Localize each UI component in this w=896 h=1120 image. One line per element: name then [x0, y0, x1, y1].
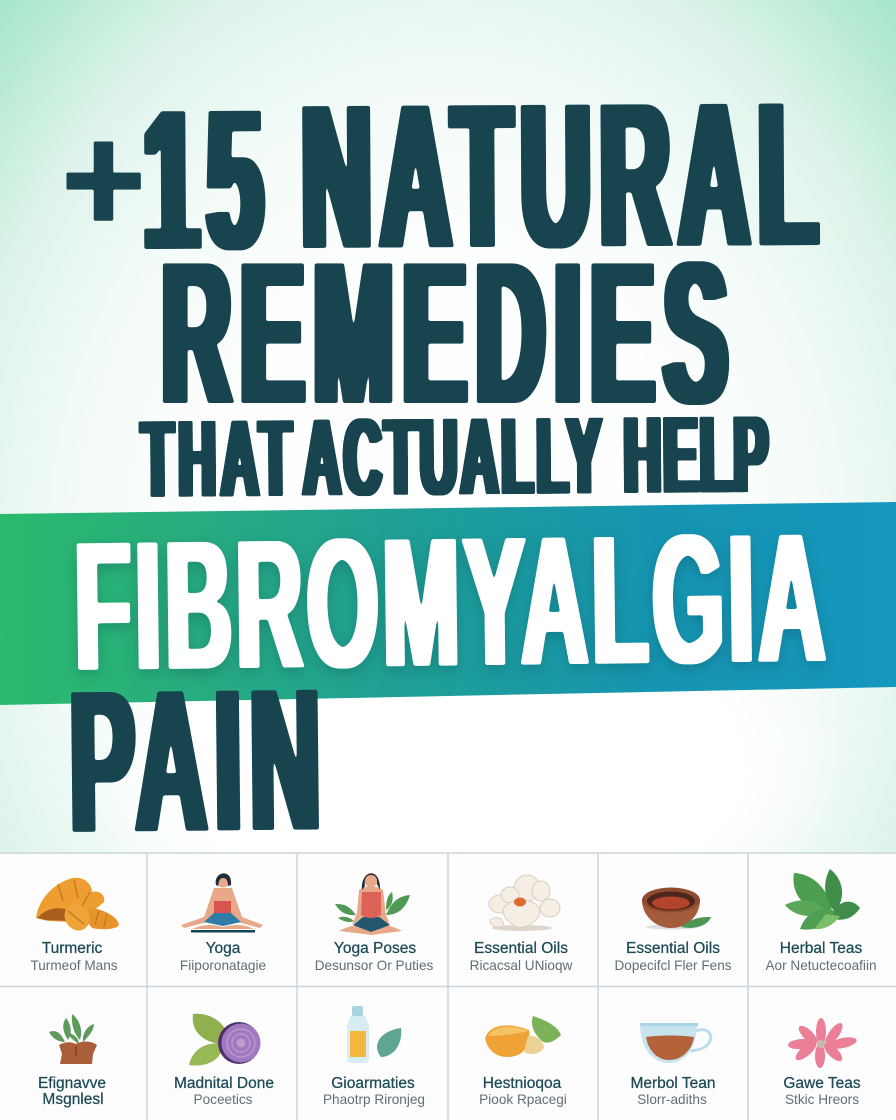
title: +15 natural: 15: [142, 67, 263, 292]
label: essential oils: Essential Oils: [626, 940, 720, 957]
cell: yoga: [180, 873, 266, 973]
icon: tea cup: [640, 1023, 711, 1063]
remedy grid panel: [0, 853, 896, 1120]
title: +15 natural: +: [62, 93, 144, 267]
cell: row 2 citrus: [479, 1016, 567, 1107]
label: gioarmaties: Gioarmaties: [331, 1075, 415, 1092]
title: that actually help: ACTUALLY: [303, 395, 602, 520]
sublabel: herbal teas: Aor Netuctecoafiin: [765, 958, 877, 973]
icon: white flower root: [489, 875, 560, 931]
title: pain: PAIN: [69, 646, 322, 875]
title: that actually help: [141, 393, 768, 521]
title: that actually help: HELP: [623, 393, 768, 517]
icon: oil bottle with leaf: [347, 1006, 401, 1063]
title: +15 natural: NATURAL: [301, 59, 818, 293]
sublabel: poceetics: Poceetics: [194, 1092, 253, 1107]
background gradient: [0, 0, 896, 860]
cell: yoga poses: [315, 873, 434, 973]
sublabel: piook rpacegi: Piook Rpacegi: [479, 1092, 567, 1107]
label: efignavve: Efignavve: [38, 1075, 106, 1092]
cell: row 2 oil bottle: [323, 1006, 425, 1107]
cell: row 2 pink flower: [783, 1018, 861, 1107]
title: that actually help: THAT: [141, 397, 292, 521]
label: merbol tean: Merbol Tean: [630, 1075, 716, 1092]
sublabel: yoga: Fiiporonatagie: [180, 958, 266, 973]
icon: purple onion with leaves: [189, 1014, 260, 1066]
icon: herb with root: [49, 1014, 97, 1064]
title: +15 natural: [62, 59, 818, 293]
sublabel: stikic hreors: Stkic Hreors: [785, 1092, 859, 1107]
sublabel: msgnlesl: Msgnlesl: [42, 1091, 104, 1108]
cell: essential oils 2: [614, 888, 732, 973]
cell: turmeric: [30, 878, 119, 973]
icon: pink flower: [788, 1018, 858, 1068]
title: remedies: REMEDIES: [162, 219, 727, 447]
label: yoga: Yoga: [206, 940, 241, 957]
icon: turmeric root: [36, 878, 119, 935]
icon: yoga pose with leaves: [335, 873, 410, 935]
label: hestnioqoa: Hestnioqoa: [483, 1075, 562, 1092]
sublabel: essential oils: Ricacsal UNioqw: [470, 958, 573, 973]
title: fibromyalgia: FIBROMYALGIA: [73, 494, 826, 709]
label: gawe teas: Gawe Teas: [783, 1075, 861, 1092]
sublabel: yoga poses: Desunsor Or Puties: [315, 958, 434, 973]
cell: essential oils 1: [470, 875, 573, 973]
banner: [0, 502, 896, 705]
icon: spice bowl: [642, 888, 711, 930]
label: turmeric: Turmeric: [42, 940, 103, 957]
cell: herbal teas: [765, 869, 877, 973]
cell: row 2 herb and root: [38, 1014, 106, 1108]
label: madnital done: Madnital Done: [174, 1075, 274, 1092]
cell: row 2 onion: [174, 1014, 274, 1107]
icon: yoga figure: [181, 873, 263, 932]
icon: green leaves: [785, 869, 860, 930]
sublabel: essential oils: Dopecifcl Fler Fens: [614, 958, 732, 973]
label: herbal teas: Herbal Teas: [780, 940, 862, 957]
icon: citrus with leaf: [485, 1016, 561, 1057]
sublabel: phaotrp rironjeg: Phaotrp Rironjeg: [323, 1092, 425, 1107]
label: essential oils: Essential Oils: [474, 940, 568, 957]
cell: row 2 tea cup: [630, 1023, 716, 1107]
sublabel: turmeric: Turmeof Mans: [30, 958, 118, 973]
label: yoga poses: Yoga Poses: [334, 940, 416, 957]
sublabel: slorr-adiths: Slorr-adiths: [637, 1092, 707, 1107]
